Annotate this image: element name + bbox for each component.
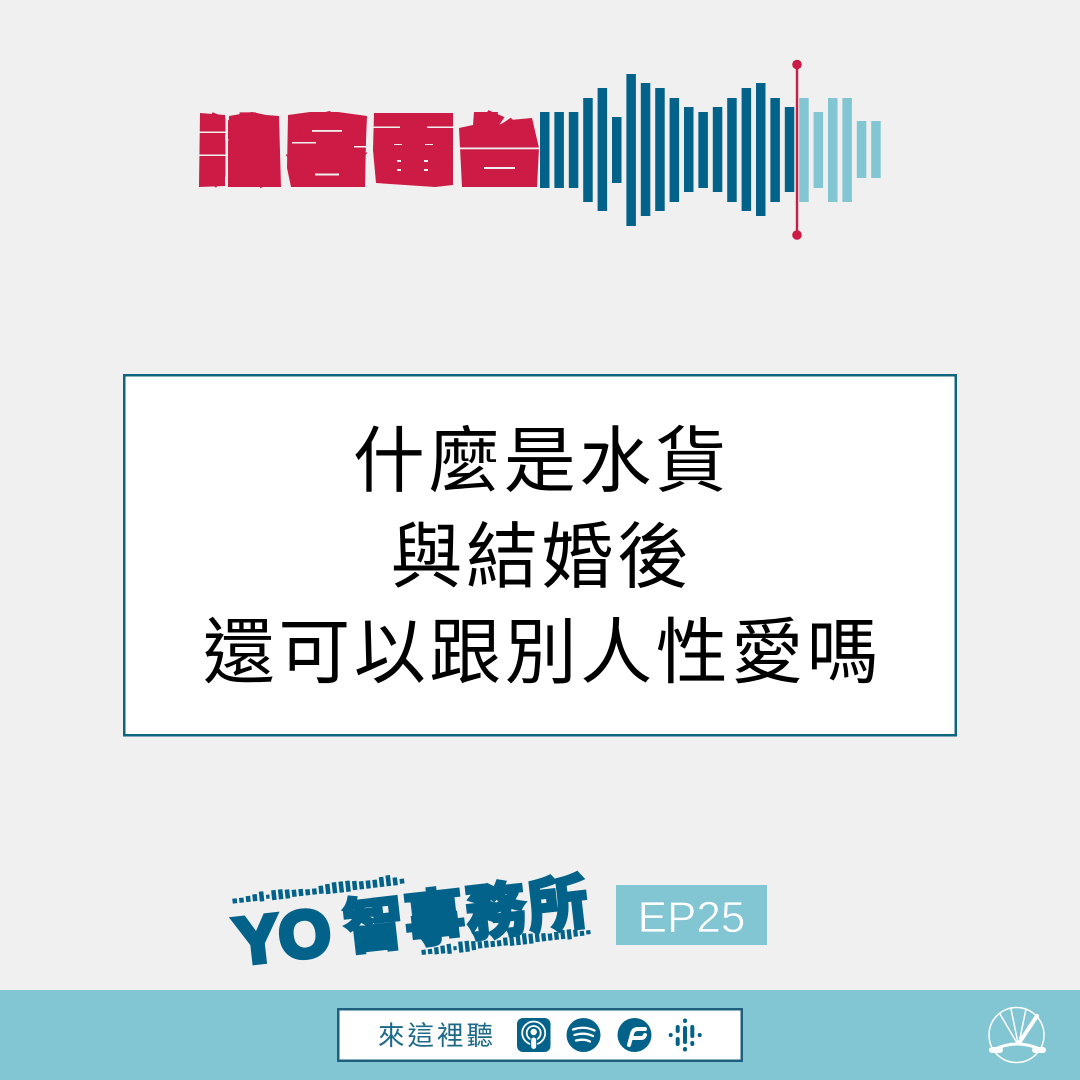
episode label: EP25 [638, 893, 745, 942]
footer band [0, 990, 1080, 1080]
listen label: 來這裡聽 [378, 1021, 496, 1051]
icon: spotify [566, 1018, 600, 1052]
playhead [792, 60, 802, 240]
headline text: 與結婚後 [390, 518, 693, 598]
audio waveform [540, 60, 881, 240]
icon: google podcasts [671, 1020, 700, 1050]
show name CJK text: 智事務所 [340, 868, 591, 962]
icon: firstory [618, 1018, 652, 1052]
logo title: 法客電台: 法客電台 [203, 113, 533, 191]
show logo: YO 智事務所 [229, 853, 592, 978]
headline text: 還可以跟別人性愛嗎 [203, 614, 882, 694]
unplayed bars [799, 98, 881, 202]
icon: apple podcasts [517, 1018, 550, 1052]
headline text: 什麼是水貨 [353, 422, 730, 502]
episode badge [616, 885, 767, 945]
headline text [203, 422, 882, 694]
upper equaliser dashes [232, 873, 405, 905]
icon: white circular brand mark [989, 1008, 1044, 1062]
headline panel [124, 375, 956, 735]
listen here box [338, 1009, 742, 1061]
played bars [540, 74, 794, 226]
show name text: YO [231, 894, 334, 978]
lower equaliser dashes [421, 926, 591, 957]
